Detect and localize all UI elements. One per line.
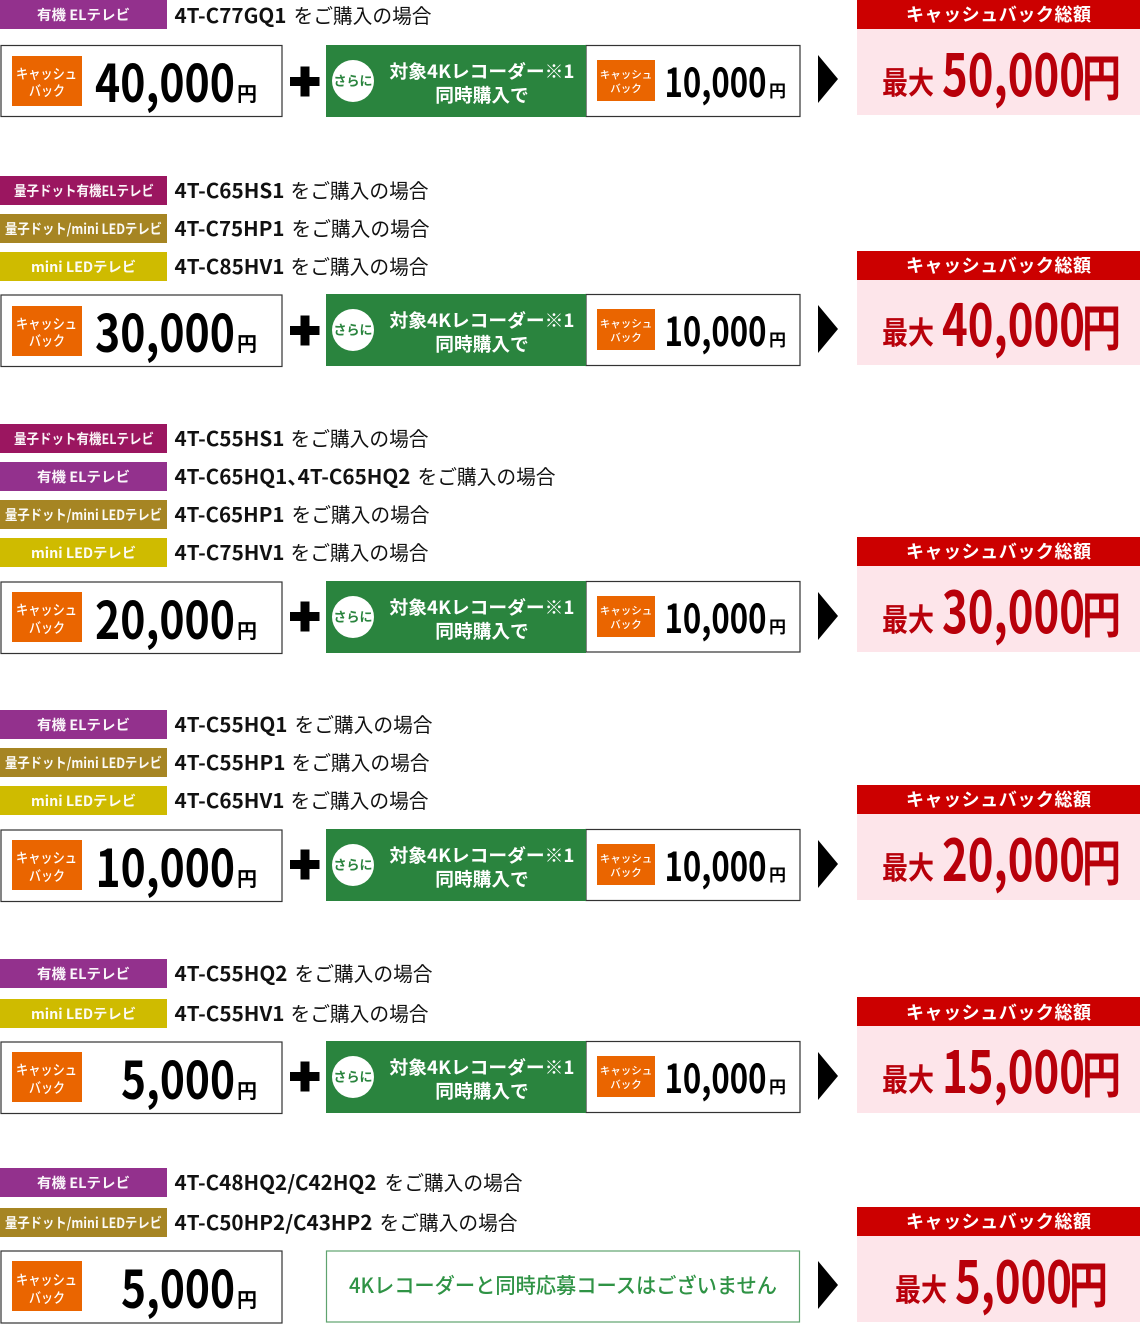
section: 15,000 yen tier (0, 958, 1140, 1114)
total panel: 20,000 yen: 20,000 (942, 814, 1085, 898)
total panel: 20,000 yen: 円 (1082, 824, 1121, 896)
model row: 4T-C55HP1: をご購入の場合 (292, 747, 430, 776)
section: 40,000 yen tier (0, 175, 1140, 367)
cashback box: 30,000 yen (1, 292, 282, 367)
model row: 4T-C65HP1: 量子ドット/mini LEDテレビ (5, 505, 162, 525)
plus icon (290, 850, 320, 880)
total panel: 30,000 yen: キャッシュバック総額 (906, 538, 1091, 564)
model row: 4T-C55HQ1 (0, 709, 433, 739)
model row: 4T-C55HQ1: 有機 ELテレビ (37, 715, 130, 735)
cashback box: 5,000 yen: キャッシュ (16, 1270, 77, 1290)
model row: 4T-C65HS1: 量子ドット有機ELテレビ (14, 181, 154, 201)
total panel: 50,000 yen: 最大 (882, 58, 934, 103)
total panel: 5,000 yen: キャッシュバック総額 (906, 1208, 1091, 1234)
model row: 4T-C55HQ2: 4T-C55HQ2 (174, 958, 288, 987)
arrow (818, 1261, 838, 1309)
recorder bonus: green banner and 10,000 yen: 同時購入で (435, 81, 529, 108)
section: 50,000 yen tier (0, 0, 1140, 117)
cashback box: 30,000 yen: バック (29, 331, 65, 351)
cashback box: 20,000 yen: バック (29, 618, 65, 638)
model row: 4T-C65HV1: mini LEDテレビ (31, 791, 136, 811)
model row: 4T-C77GQ1: 4T-C77GQ1 (174, 0, 286, 29)
cashback box: 20,000 yen (1, 579, 282, 654)
recorder bonus: green banner and 10,000 yen: 10,000 (664, 587, 766, 645)
recorder bonus: green banner and 10,000 yen: 円 (769, 1073, 786, 1098)
model row: 4T-C85HV1 (0, 251, 429, 281)
recorder bonus: green banner and 10,000 yen: 10,000 (664, 835, 766, 893)
recorder bonus: green banner and 10,000 yen: 円 (769, 613, 786, 638)
recorder bonus: green banner and 10,000 yen: 同時購入で (435, 330, 529, 357)
model row: 4T-C48HQ2/C42HQ2: をご購入の場合 (384, 1167, 523, 1196)
total panel: 15,000 yen: 円 (1082, 1036, 1121, 1108)
total panel: 5,000 yen: 5,000 (955, 1236, 1072, 1320)
model row: 4T-C65HV1: をご購入の場合 (290, 785, 429, 814)
model row: 4T-C55HV1: 4T-C55HV1 (174, 998, 284, 1027)
cashback box: 30,000 yen: 30,000 (95, 292, 235, 367)
total panel: 20,000 yen: キャッシュバック総額 (906, 786, 1091, 812)
model row: 4T-C75HP1 (0, 213, 430, 243)
model row: 4T-C85HV1: をご購入の場合 (290, 251, 429, 280)
section: 20,000 yen tier (0, 709, 1140, 902)
cashback box: 40,000 yen (1, 42, 282, 117)
model row: 4T-C55HS1: 量子ドット有機ELテレビ (14, 429, 154, 449)
total panel: 5,000 yen (857, 1207, 1140, 1322)
recorder bonus: green banner and 10,000 yen: 円 (769, 77, 786, 102)
cashback box: 5,000 yen (1, 1039, 282, 1114)
cashback box: 5,000 yen: 円 (237, 1075, 257, 1104)
arrow (818, 592, 838, 640)
recorder bonus: green banner and 10,000 yen: さらに (333, 70, 373, 90)
model row: 4T-C75HV1: 4T-C75HV1 (174, 537, 284, 566)
section: 30,000 yen tier (0, 423, 1140, 654)
recorder bonus: green banner and 10,000 yen: 同時購入で (435, 865, 529, 892)
model row: 4T-C65HS1: をご購入の場合 (290, 175, 429, 204)
total panel: 20,000 yen: 最大 (882, 843, 934, 888)
model row: 4T-C65HQ1, 4T-C65HQ2 (0, 461, 556, 491)
total panel: 15,000 yen: キャッシュバック総額 (906, 999, 1091, 1025)
model row: 4T-C77GQ1 (0, 0, 432, 29)
total panel: 30,000 yen: 最大 (882, 595, 934, 640)
model row: 4T-C65HV1: 4T-C65HV1 (174, 785, 284, 814)
cashback box: 5,000 yen: 円 (237, 1284, 257, 1313)
arrow (818, 305, 838, 353)
recorder bonus: green banner and 10,000 yen: 対象4Kレコーダー※1 (390, 842, 574, 868)
model row: 4T-C65HV1 (0, 785, 429, 815)
total panel: 30,000 yen: 円 (1082, 576, 1121, 648)
recorder bonus: green banner and 10,000 yen (326, 45, 800, 117)
recorder bonus: green banner and 10,000 yen (326, 581, 800, 653)
model row: 4T-C50HP2/C43HP2: 4T-C50HP2/C43HP2 (174, 1207, 372, 1236)
cashback box: 10,000 yen: 10,000 (96, 827, 235, 902)
cashback box: 10,000 yen (1, 827, 282, 902)
cashback box: 5,000 yen: 5,000 (121, 1248, 235, 1323)
model row: 4T-C55HQ1: をご購入の場合 (294, 709, 433, 738)
cashback box: 30,000 yen: 円 (237, 328, 257, 357)
model row: 4T-C48HQ2/C42HQ2: 有機 ELテレビ (37, 1173, 130, 1193)
cashback box: 40,000 yen: キャッシュ (16, 64, 77, 84)
model row: 4T-C85HV1: mini LEDテレビ (31, 257, 136, 277)
total panel: 40,000 yen: 最大 (882, 308, 934, 353)
model row: 4T-C55HQ2 (0, 958, 433, 988)
recorder bonus: green banner and 10,000 yen (326, 829, 800, 901)
model row: 4T-C55HQ1: 4T-C55HQ1 (174, 709, 288, 738)
cashback box: 5,000 yen: 5,000 (121, 1039, 235, 1114)
model row: 4T-C50HP2/C43HP2: をご購入の場合 (380, 1207, 518, 1236)
recorder bonus: green banner and 10,000 yen: 円 (769, 861, 786, 886)
total panel: 40,000 yen (857, 251, 1140, 365)
recorder bonus: green banner and 10,000 yen: バック (610, 330, 642, 345)
cashback box: 5,000 yen: バック (29, 1288, 65, 1308)
plus icon (290, 1062, 320, 1092)
model row: 4T-C55HP1: 量子ドット/mini LEDテレビ (5, 753, 162, 773)
model row: 4T-C65HP1 (0, 499, 430, 529)
recorder bonus: green banner and 10,000 yen: 対象4Kレコーダー※1 (390, 594, 574, 620)
model row: 4T-C55HS1: をご購入の場合 (290, 423, 429, 452)
recorder bonus: green banner and 10,000 yen: 同時購入で (435, 617, 529, 644)
model row: 4T-C55HQ2: 有機 ELテレビ (37, 964, 130, 984)
cashback box: 5,000 yen: キャッシュ (16, 1060, 77, 1080)
model row: 4T-C50HP2/C43HP2: 量子ドット/mini LEDテレビ (5, 1213, 162, 1233)
model row: 4T-C65HP1: をご購入の場合 (292, 499, 430, 528)
model row: 4T-C65HQ1, 4T-C65HQ2: 有機 ELテレビ (37, 467, 130, 487)
cashback box: 30,000 yen: キャッシュ (16, 314, 77, 334)
recorder bonus: green banner and 10,000 yen: キャッシュ (600, 603, 652, 618)
recorder bonus: green banner and 10,000 yen: バック (610, 81, 642, 96)
total panel: 30,000 yen: 30,000 (942, 566, 1085, 650)
model row: 4T-C77GQ1: 有機 ELテレビ (37, 5, 130, 25)
total panel: 40,000 yen: 円 (1082, 289, 1121, 361)
total panel: 15,000 yen: 最大 (882, 1055, 934, 1100)
model row: 4T-C55HV1: mini LEDテレビ (31, 1004, 136, 1024)
model row: 4T-C77GQ1: をご購入の場合 (294, 0, 432, 29)
plus icon (290, 602, 320, 632)
model row: 4T-C75HV1: をご購入の場合 (290, 537, 429, 566)
total panel: 20,000 yen (857, 785, 1140, 900)
recorder bonus: green banner and 10,000 yen: 10,000 (664, 1047, 766, 1105)
total panel: 5,000 yen: 円 (1069, 1246, 1108, 1318)
model row: 4T-C65HP1: 4T-C65HP1 (174, 499, 284, 528)
arrow (818, 55, 838, 103)
model row: 4T-C50HP2/C43HP2 (0, 1207, 518, 1237)
arrow (818, 1052, 838, 1100)
recorder bonus: green banner and 10,000 yen: 対象4Kレコーダー※1 (390, 307, 574, 333)
recorder bonus: green banner and 10,000 yen: 対象4Kレコーダー※1 (390, 58, 574, 84)
model row: 4T-C65HS1 (0, 175, 429, 205)
cashback box: 20,000 yen: 20,000 (95, 579, 235, 654)
model row: 4T-C75HV1 (0, 537, 429, 567)
total panel: 50,000 yen: キャッシュバック総額 (906, 1, 1091, 27)
cashback box: 40,000 yen: バック (29, 81, 65, 101)
model row: 4T-C55HQ2: をご購入の場合 (294, 958, 433, 987)
model row: 4T-C55HS1: 4T-C55HS1 (174, 423, 284, 452)
total panel: 50,000 yen: 50,000 (942, 29, 1085, 113)
model row: 4T-C75HP1: 量子ドット/mini LEDテレビ (5, 219, 162, 239)
recorder bonus: green banner and 10,000 yen (326, 294, 800, 366)
recorder bonus: green banner and 10,000 yen: さらに (333, 606, 373, 626)
total panel: 50,000 yen (857, 0, 1140, 115)
model row: 4T-C55HP1: 4T-C55HP1 (174, 747, 286, 776)
recorder bonus: green banner and 10,000 yen: バック (610, 1077, 642, 1092)
recorder bonus: green banner and 10,000 yen: 円 (769, 326, 786, 351)
recorder bonus: green banner and 10,000 yen: 10,000 (664, 51, 766, 109)
model row: 4T-C55HV1 (0, 998, 429, 1028)
model row: 4T-C65HQ1, 4T-C65HQ2: 4T-C65HQ1、4T-C65HQ2 (174, 461, 410, 490)
total panel: 15,000 yen (857, 997, 1140, 1113)
model row: 4T-C75HP1: 4T-C75HP1 (174, 213, 284, 242)
cashback box: 40,000 yen: 40,000 (95, 42, 235, 117)
total panel: 15,000 yen: 15,000 (942, 1026, 1085, 1110)
model row: 4T-C75HV1: mini LEDテレビ (31, 543, 136, 563)
total panel: 40,000 yen: キャッシュバック総額 (906, 252, 1091, 278)
model row: 4T-C55HV1: をご購入の場合 (290, 998, 429, 1027)
plus icon (290, 316, 320, 346)
model row: 4T-C55HS1 (0, 423, 429, 453)
model row: 4T-C75HP1: をご購入の場合 (292, 213, 430, 242)
cashback box: 10,000 yen: キャッシュ (16, 848, 77, 868)
notice: no recorder course (326, 1251, 800, 1322)
cashback box: 5,000 yen: バック (29, 1078, 65, 1098)
recorder bonus: green banner and 10,000 yen: キャッシュ (600, 851, 652, 866)
recorder bonus: green banner and 10,000 yen: バック (610, 865, 642, 880)
section: 5,000 yen tier (0, 1167, 1140, 1323)
plus icon (290, 66, 320, 96)
recorder bonus: green banner and 10,000 yen: 同時購入で (435, 1077, 529, 1104)
total panel: 40,000 yen: 40,000 (942, 279, 1085, 363)
recorder bonus: green banner and 10,000 yen (326, 1041, 800, 1113)
model row: 4T-C65HQ1, 4T-C65HQ2: をご購入の場合 (418, 461, 556, 490)
cashback box: 20,000 yen: 円 (237, 615, 257, 644)
notice: no recorder course: 4Kレコーダーと同時応募コースはございません (349, 1270, 777, 1300)
model row: 4T-C48HQ2/C42HQ2: 4T-C48HQ2/C42HQ2 (174, 1167, 376, 1196)
arrow (818, 840, 838, 888)
recorder bonus: green banner and 10,000 yen: バック (610, 617, 642, 632)
recorder bonus: green banner and 10,000 yen: キャッシュ (600, 1063, 652, 1078)
recorder bonus: green banner and 10,000 yen: キャッシュ (600, 316, 652, 331)
total panel: 50,000 yen: 円 (1082, 39, 1121, 111)
recorder bonus: green banner and 10,000 yen: さらに (333, 854, 373, 874)
model row: 4T-C48HQ2/C42HQ2 (0, 1167, 523, 1197)
cashback box: 5,000 yen (1, 1248, 282, 1323)
total panel: 30,000 yen (857, 537, 1140, 652)
model row: 4T-C85HV1: 4T-C85HV1 (174, 251, 284, 280)
cashback box: 10,000 yen: 円 (237, 863, 257, 892)
cashback box: 10,000 yen: バック (29, 866, 65, 886)
model row: 4T-C55HP1 (0, 747, 430, 777)
recorder bonus: green banner and 10,000 yen: 対象4Kレコーダー※1 (390, 1054, 574, 1080)
total panel: 5,000 yen: 最大 (895, 1265, 947, 1310)
recorder bonus: green banner and 10,000 yen: さらに (333, 1066, 373, 1086)
recorder bonus: green banner and 10,000 yen: さらに (333, 320, 373, 338)
model row: 4T-C65HS1: 4T-C65HS1 (174, 175, 284, 204)
recorder bonus: green banner and 10,000 yen: 10,000 (664, 300, 766, 358)
recorder bonus: green banner and 10,000 yen: キャッシュ (600, 67, 652, 82)
cashback box: 40,000 yen: 円 (237, 78, 257, 107)
cashback box: 20,000 yen: キャッシュ (16, 600, 77, 620)
